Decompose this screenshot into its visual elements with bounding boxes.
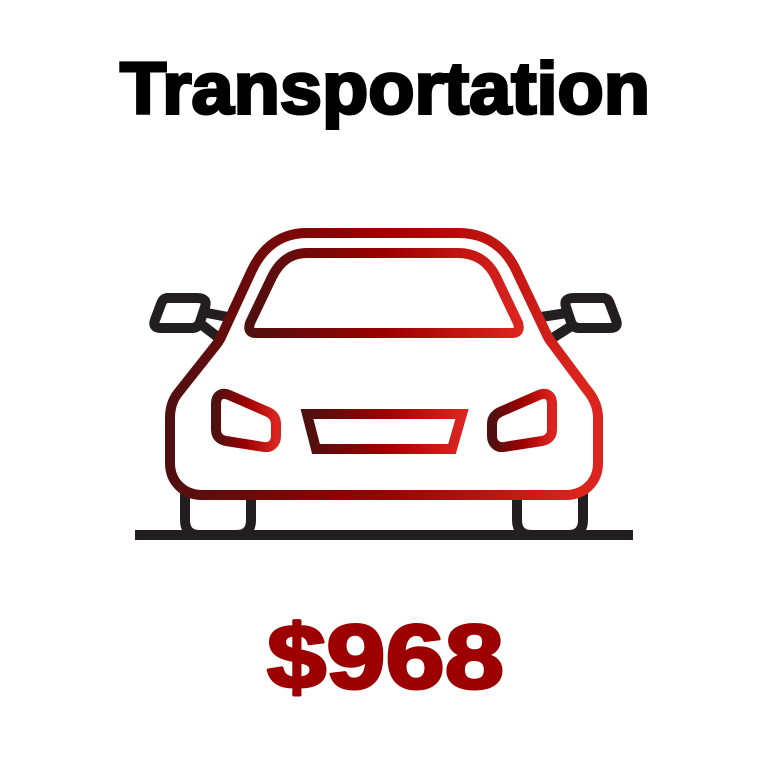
right wheel (517, 490, 583, 535)
ground line (135, 530, 633, 540)
grille (307, 414, 462, 449)
icon: car (135, 233, 633, 535)
price: $968 (267, 607, 504, 708)
windshield (249, 253, 519, 333)
car body (170, 233, 598, 495)
right headlight (492, 394, 552, 447)
title: Transportation (120, 48, 650, 130)
left wheel (185, 490, 251, 535)
left mirror (154, 298, 228, 338)
left headlight (216, 394, 276, 447)
right mirror (541, 298, 617, 339)
